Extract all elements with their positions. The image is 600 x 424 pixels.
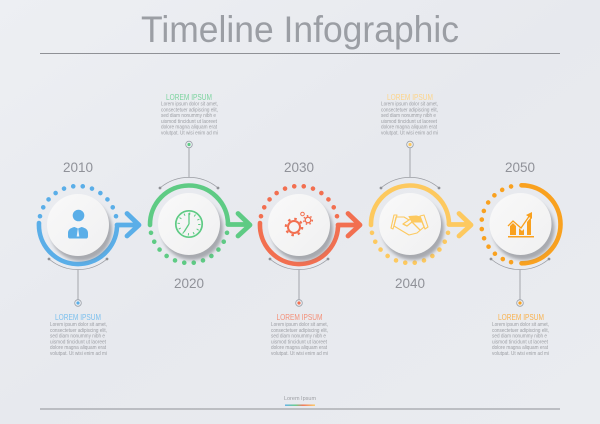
disc [47, 194, 112, 261]
text block: dolore magna aliquam erat [271, 345, 327, 351]
text block: uismod tincidunt ut laoreet [50, 339, 106, 345]
year 2030: 2030 [284, 160, 314, 175]
footer label: Lorem Ipsum [284, 396, 316, 402]
text block: uismod tincidunt ut laoreet [271, 339, 327, 345]
disc [490, 193, 554, 260]
text block: dolore magna aliquam erat [50, 345, 106, 351]
text block [492, 313, 549, 357]
year 2040: 2040 [395, 276, 425, 291]
text block: volutpat. Ut wisi enim ad mi [50, 351, 107, 357]
arrow: blue [117, 214, 139, 236]
disc [379, 193, 444, 260]
icon: rising chart [508, 212, 534, 238]
text block: consectetuer adipiscing elit, [50, 328, 107, 334]
bracket [48, 258, 108, 306]
step 2050 [479, 160, 560, 357]
step 2030 [258, 160, 360, 357]
disc [158, 193, 223, 260]
bracket [490, 258, 550, 306]
ring: blue [37, 184, 119, 264]
title: Timeline Infographic [141, 9, 459, 50]
year 2020: 2020 [174, 276, 204, 291]
bracket [380, 141, 440, 189]
ring: green [148, 185, 230, 265]
text block: Lorem ipsum dolor sit amet, [492, 322, 549, 328]
step 2020 [148, 93, 250, 291]
footer label [284, 396, 316, 406]
step 2010 [37, 160, 139, 357]
year 2050: 2050 [505, 160, 535, 175]
text block: uismod tincidunt ut laoreet [161, 119, 217, 125]
ring: red [258, 184, 340, 264]
text block: sed diam nonummy nibh e [161, 113, 216, 119]
text block: uismod tincidunt ut laoreet [492, 339, 548, 345]
text block: sed diam nonummy nibh e [271, 334, 326, 340]
text block: LOREM IPSUM [498, 313, 544, 322]
bracket [269, 258, 329, 306]
text block: dolore magna aliquam erat [161, 125, 217, 131]
text block: consectetuer adipiscing elit, [161, 107, 218, 113]
icon: gears [286, 212, 312, 235]
text block: LOREM IPSUM [276, 313, 323, 322]
text block: uismod tincidunt ut laoreet [381, 119, 437, 125]
arrow: yellow [449, 214, 471, 236]
text block: LOREM IPSUM [166, 93, 212, 102]
icon: clock [176, 211, 202, 237]
text block [50, 313, 107, 357]
arrow: green [228, 214, 250, 236]
text block: LOREM IPSUM [387, 93, 433, 102]
ring: orange [479, 184, 560, 265]
text block: consectetuer adipiscing elit, [271, 328, 328, 334]
step 2040 [369, 93, 471, 291]
text block: volutpat. Ut wisi enim ad mi [381, 130, 438, 136]
text block: consectetuer adipiscing elit, [492, 328, 549, 334]
text block: sed diam nonummy nibh e [50, 334, 105, 340]
text block: LOREM IPSUM [55, 313, 101, 322]
bracket [159, 141, 219, 189]
text block [271, 313, 328, 357]
icon: handshake [391, 215, 428, 235]
text block: Lorem ipsum dolor sit amet, [161, 102, 218, 108]
text block: Lorem ipsum dolor sit amet, [271, 322, 328, 328]
text block: sed diam nonummy nibh e [492, 334, 547, 340]
text block: volutpat. Ut wisi enim ad mi [492, 351, 549, 357]
text block: volutpat. Ut wisi enim ad mi [161, 130, 218, 136]
text block [161, 93, 218, 136]
icon: businessman [68, 210, 88, 238]
year 2010: 2010 [63, 160, 93, 175]
text block [381, 93, 438, 136]
text block: sed diam nonummy nibh e [381, 113, 436, 119]
text block: volutpat. Ut wisi enim ad mi [271, 351, 328, 357]
arrow: red [338, 214, 360, 236]
ring: yellow [369, 185, 451, 265]
text block: dolore magna aliquam erat [492, 345, 548, 351]
disc [268, 194, 333, 261]
text block: Lorem ipsum dolor sit amet, [381, 102, 438, 108]
text block: consectetuer adipiscing elit, [381, 107, 438, 113]
text block: dolore magna aliquam erat [381, 125, 437, 131]
text block: Lorem ipsum dolor sit amet, [50, 322, 107, 328]
